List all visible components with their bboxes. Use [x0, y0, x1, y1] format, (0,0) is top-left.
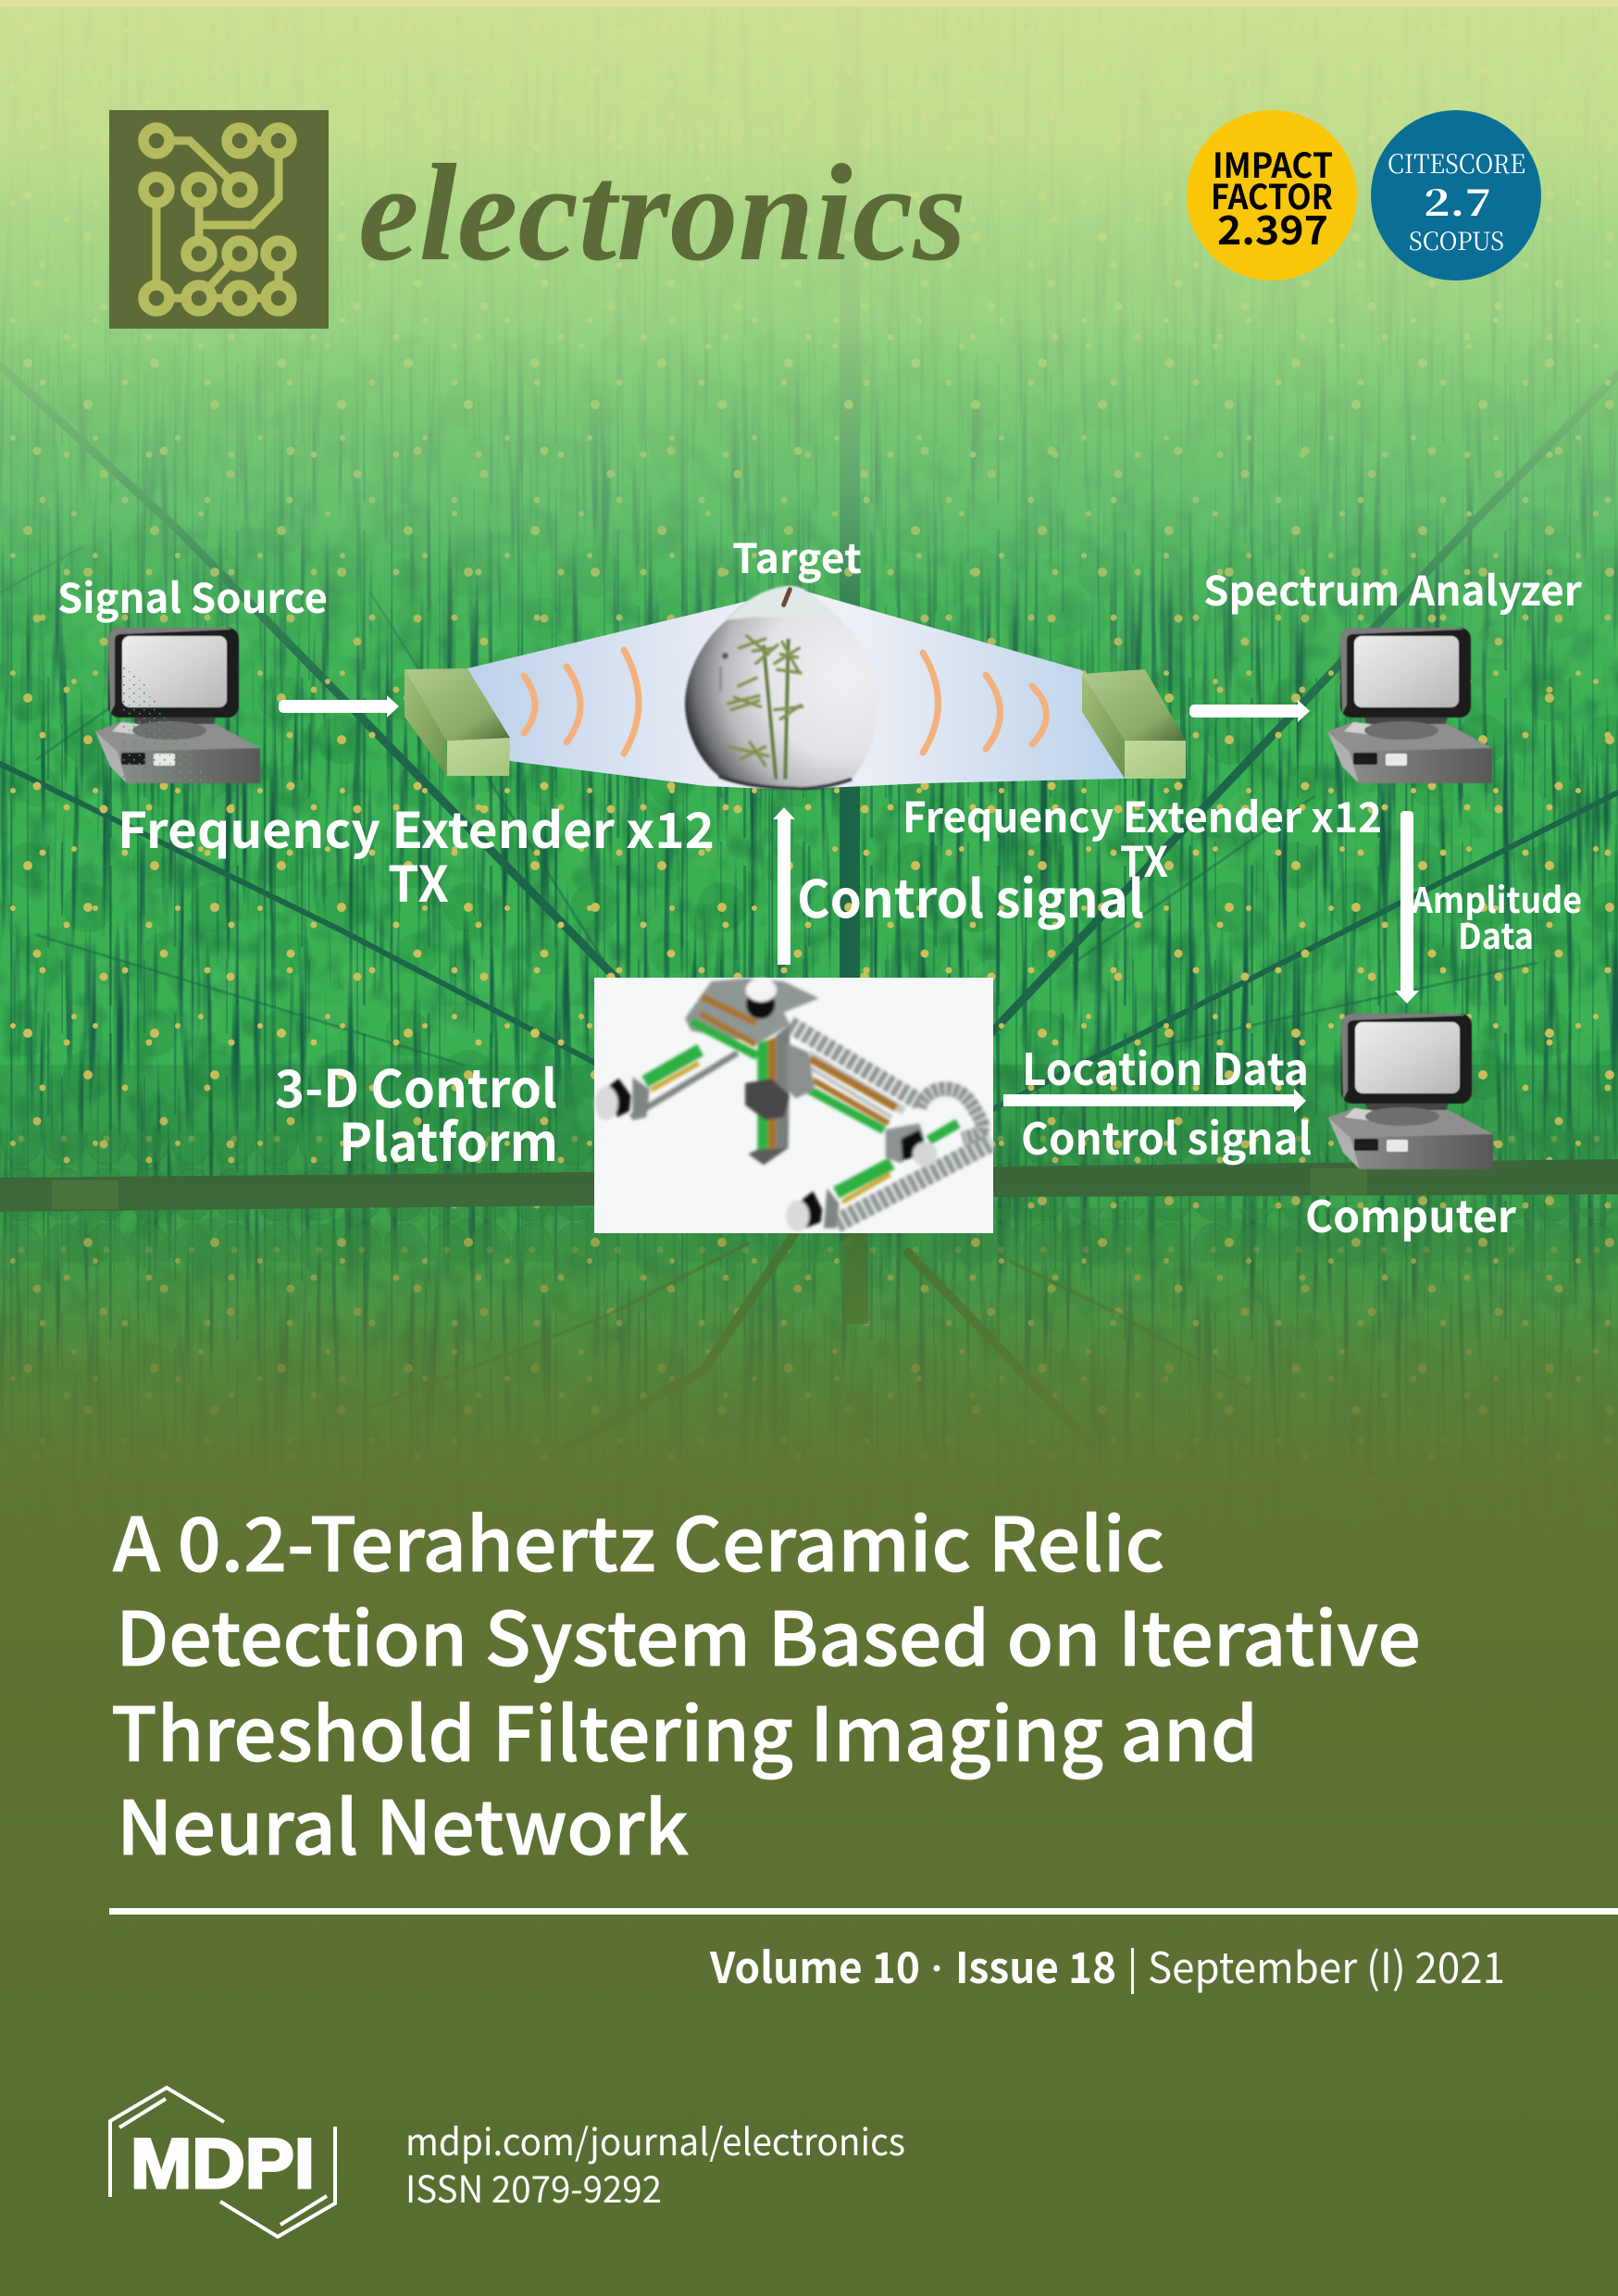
- journal url and ISSN: [405, 2113, 905, 2214]
- computer: signal source: [95, 628, 260, 783]
- journal logo: circuit icon: [109, 110, 329, 329]
- badge: citescore: CITESCORE: [1388, 144, 1525, 181]
- computer: data computer: [1328, 1014, 1493, 1169]
- badge: citescore: SCOPUS: [1409, 221, 1504, 257]
- label: 3-D control platform: [275, 1048, 558, 1177]
- volume and issue line: Issue 18: [955, 1935, 1116, 1996]
- badge: citescore: [1371, 110, 1541, 281]
- 3-D control platform image: [594, 978, 993, 1233]
- label: control signal horizontal: Control signal: [1021, 1104, 1312, 1167]
- badge: impact factor: IMPACT: [1213, 138, 1333, 188]
- label: frequency extender left: [118, 792, 715, 917]
- label: frequency extender left: TX: [388, 846, 449, 917]
- label: frequency extender left: Frequency Extender x12: [118, 792, 715, 863]
- label: amplitude data: Amplitude: [1411, 872, 1582, 923]
- badge: citescore: 2.7: [1424, 174, 1491, 227]
- label: computer: Computer: [1305, 1181, 1516, 1245]
- badge: impact factor: 2.397: [1217, 199, 1328, 256]
- label: 3-D control platform: Platform: [339, 1102, 558, 1177]
- label: control signal vertical: Control signal: [797, 858, 1144, 933]
- arrow: amplitude data down: [1395, 811, 1419, 1004]
- journal url and ISSN: mdpi.com/journal/electronics: [405, 2113, 905, 2166]
- journal url and ISSN: ISSN 2079-9292: [405, 2160, 662, 2214]
- badge: impact factor: FACTOR: [1211, 169, 1333, 219]
- computer: spectrum analyzer: [1327, 628, 1492, 783]
- article title: A 0.2-Terahertz Ceramic Relic: [113, 1486, 1164, 1593]
- label: target: Target: [732, 526, 862, 585]
- badge: impact factor: [1187, 110, 1357, 281]
- horn: left extender: [404, 668, 510, 776]
- article title: Detection System Based on Iterative: [116, 1580, 1421, 1688]
- beam between extenders: [467, 589, 1125, 790]
- label: signal source: Signal Source: [57, 566, 328, 625]
- horn: right extender: [1082, 669, 1186, 779]
- volume and issue line: September (I) 2021: [1148, 1935, 1505, 1996]
- waves: right: [923, 653, 1046, 753]
- ceramic target pot: [685, 586, 877, 789]
- arrow: extender to analyzer: [1189, 700, 1310, 722]
- waves: left: [524, 650, 639, 754]
- article title: [111, 1486, 1421, 1877]
- arrow: source to extender: [279, 695, 399, 718]
- article title: Neural Network: [117, 1769, 689, 1877]
- label: amplitude data: [1411, 872, 1582, 959]
- label: spectrum analyzer: Spectrum Analyzer: [1203, 558, 1583, 618]
- journal name: electronics: [358, 136, 966, 290]
- label: frequency extender right: [902, 784, 1382, 889]
- label: 3-D control platform: 3-D Control: [275, 1048, 557, 1123]
- divider rule: [109, 1908, 1618, 1915]
- arrow: control signal up: [773, 807, 795, 965]
- label: frequency extender right: TX: [1120, 829, 1168, 889]
- volume and issue line: Volume 10: [709, 1935, 920, 1996]
- label: location data: Location Data: [1022, 1034, 1309, 1098]
- MDPI logo: MDPI: [131, 2125, 315, 2203]
- label: frequency extender right: Frequency Extender x12: [902, 784, 1382, 844]
- article title: Threshold Filtering Imaging and: [111, 1676, 1258, 1783]
- MDPI logo: [110, 2088, 335, 2237]
- arrow: location data: [1003, 1089, 1306, 1113]
- label: amplitude data: Data: [1458, 908, 1534, 959]
- volume and issue line: [709, 1935, 1505, 1996]
